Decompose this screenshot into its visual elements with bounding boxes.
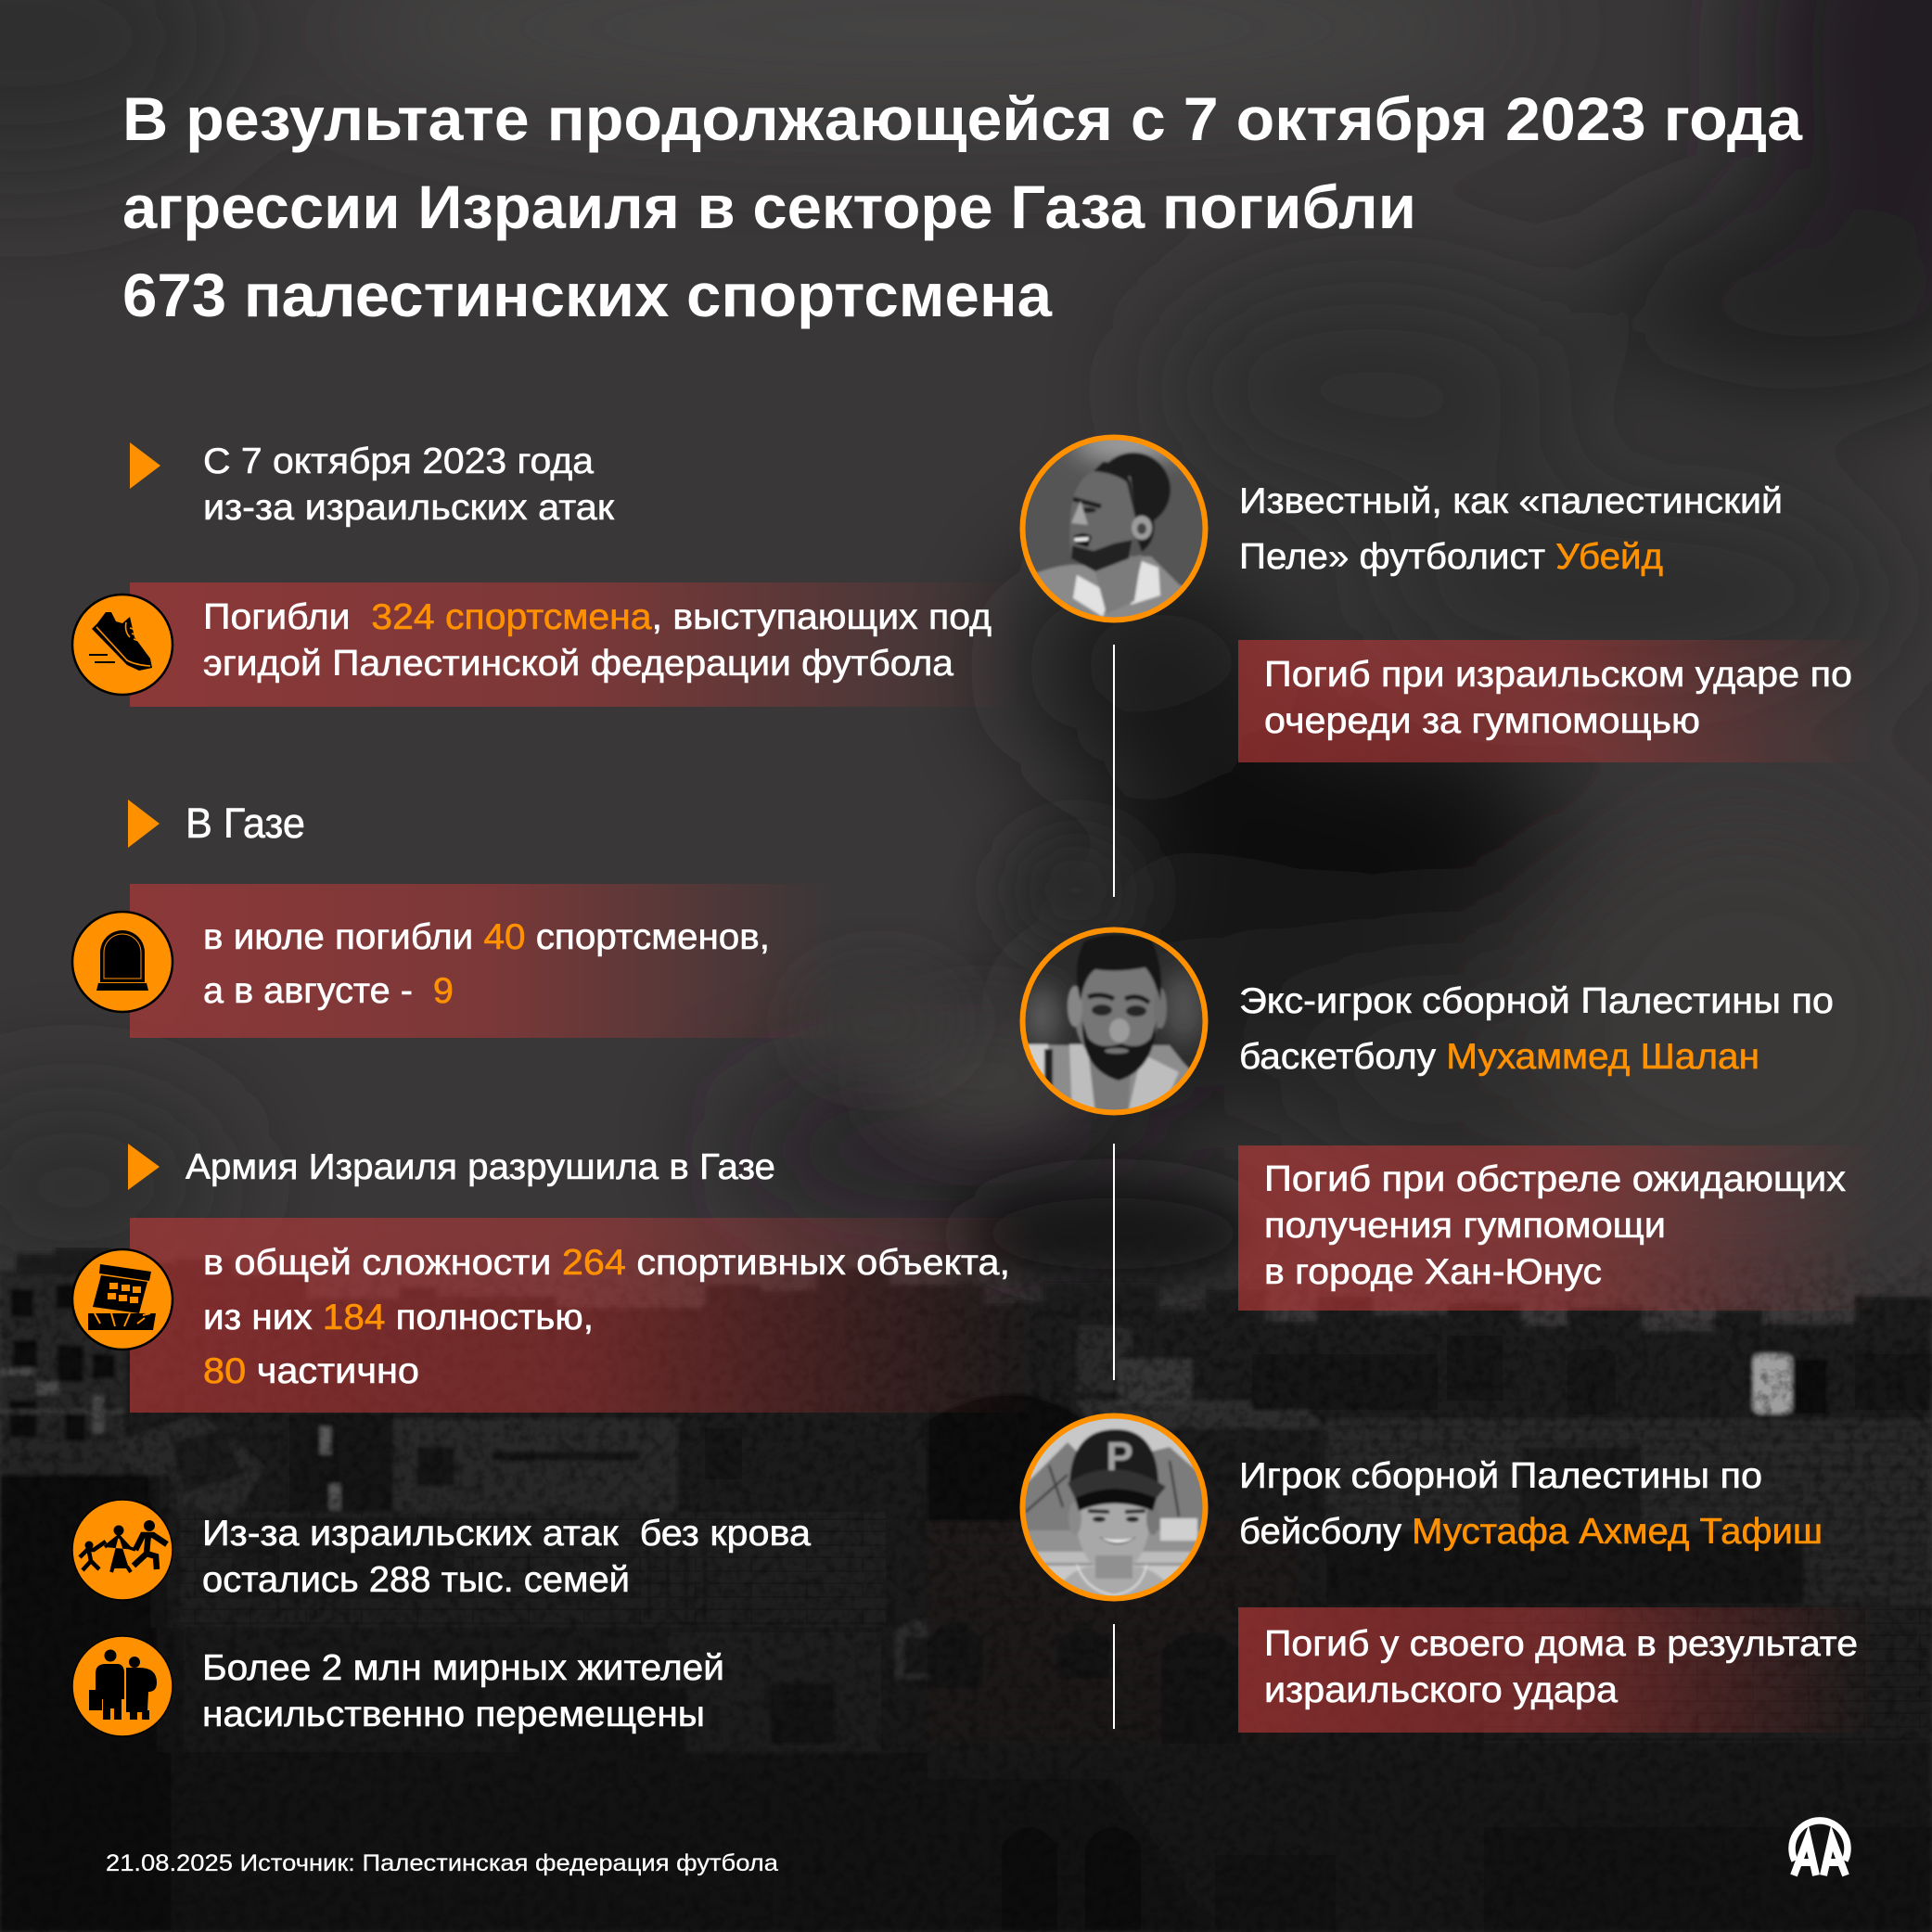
intro text — [203, 441, 615, 528]
profile: Ubeid — [1021, 427, 1878, 762]
text: homeless families: остались 288 тыс. семей — [202, 1560, 630, 1600]
timeline connector lines — [1113, 645, 1115, 1729]
description: Игрок сборной Палестины по — [1239, 1456, 1762, 1496]
cause of death: в городе Хан-Юнус — [1264, 1252, 1602, 1292]
title — [122, 84, 1803, 329]
description: Пеле» футболист Убейд — [1239, 537, 1663, 577]
statistic text — [203, 917, 770, 1011]
red band — [130, 884, 835, 1038]
cause of death: Погиб при израильском ударе по — [1264, 655, 1852, 695]
portrait: Mohammed Shalan — [1021, 928, 1207, 1114]
red band — [130, 1218, 1039, 1413]
marker arrow — [128, 1144, 160, 1190]
title: агрессии Израиля в секторе Газа погибли — [122, 173, 1416, 241]
panel: in Gaza — [72, 800, 835, 1038]
intro text: С 7 октября 2023 года — [203, 441, 594, 481]
description — [1239, 1456, 1823, 1552]
red band — [1238, 1145, 1878, 1311]
red band — [1238, 1607, 1878, 1733]
profile: Mustafa Ahmed Tafish — [1021, 1414, 1878, 1733]
icon: fleeing family — [72, 1500, 173, 1600]
red band — [1238, 640, 1878, 762]
heading: Армия Израиля разрушила в Газе — [186, 1147, 775, 1187]
description: Известный, как «палестинский — [1239, 481, 1783, 521]
statistic text: эгидой Палестинской федерации футбола — [203, 644, 953, 684]
cause of death — [1264, 1159, 1847, 1292]
logo: Anadolu Agency — [1792, 1821, 1848, 1875]
description: Экс-игрок сборной Палестины по — [1239, 981, 1834, 1021]
text: homeless families — [202, 1514, 811, 1600]
portrait: Mustafa Ahmed Tafish: P — [1106, 1434, 1133, 1479]
statistic text: в общей сложности 264 спортивных объекта, — [203, 1243, 1010, 1283]
statistic text — [203, 1243, 1010, 1391]
statistic text — [203, 597, 992, 684]
statistic text: а в августе - 9 — [203, 971, 454, 1011]
description: бейсболу Мустафа Ахмед Тафиш — [1239, 1512, 1823, 1552]
icon: collapsed building — [72, 1249, 173, 1350]
statistic text: из них 184 полностью, — [203, 1298, 594, 1337]
red band — [130, 582, 1020, 707]
portrait: Ubeid — [1021, 427, 1207, 621]
source footer: 21.08.2025 Источник: Палестинская федерация футбола — [106, 1850, 778, 1876]
heading: В Газе — [186, 800, 305, 847]
panel: sports facilities destroyed — [72, 1144, 1039, 1413]
portrait: Mustafa Ahmed Tafish — [1021, 1414, 1207, 1600]
description: баскетболу Мухаммед Шалан — [1239, 1037, 1759, 1077]
description — [1239, 981, 1834, 1077]
marker arrow — [128, 800, 160, 848]
cause of death: Погиб у своего дома в результате — [1264, 1624, 1858, 1664]
text: displaced civilians — [202, 1648, 724, 1734]
icon: displaced people with luggage — [72, 1636, 173, 1736]
cause of death: израильского удара — [1264, 1670, 1618, 1710]
cause of death: получения гумпомощи — [1264, 1206, 1666, 1246]
text: homeless families: Из-за израильских атак без крова — [202, 1514, 811, 1554]
panel: displaced civilians — [72, 1636, 724, 1736]
panel: athletes killed — [72, 441, 1020, 707]
intro text: из-за израильских атак — [203, 488, 615, 528]
statistic text: 80 частично — [203, 1351, 419, 1391]
title: 673 палестинских спортсмена — [122, 261, 1053, 329]
description — [1239, 481, 1783, 577]
icon: running shoe — [72, 595, 173, 695]
profile: Mohammed Shalan — [1021, 928, 1878, 1311]
cause of death — [1264, 1624, 1858, 1710]
icon: gravestone — [72, 912, 173, 1012]
panel: families left homeless — [72, 1500, 811, 1600]
city skyline — [0, 1247, 1932, 1932]
statistic text: Погибли 324 спортсмена , выступающих под — [203, 597, 992, 637]
marker arrow — [130, 442, 160, 489]
statistic text: в июле погибли 40 спортсменов, — [203, 917, 770, 957]
cause of death: очереди за гумпомощью — [1264, 701, 1700, 741]
title: В результате продолжающейся с 7 октября 2023 года — [122, 84, 1803, 153]
text: displaced civilians: насильственно перемещены — [202, 1695, 705, 1734]
cause of death — [1264, 655, 1852, 741]
text: displaced civilians: Более 2 млн мирных жителей — [202, 1648, 724, 1688]
cause of death: Погиб при обстреле ожидающих — [1264, 1159, 1847, 1199]
